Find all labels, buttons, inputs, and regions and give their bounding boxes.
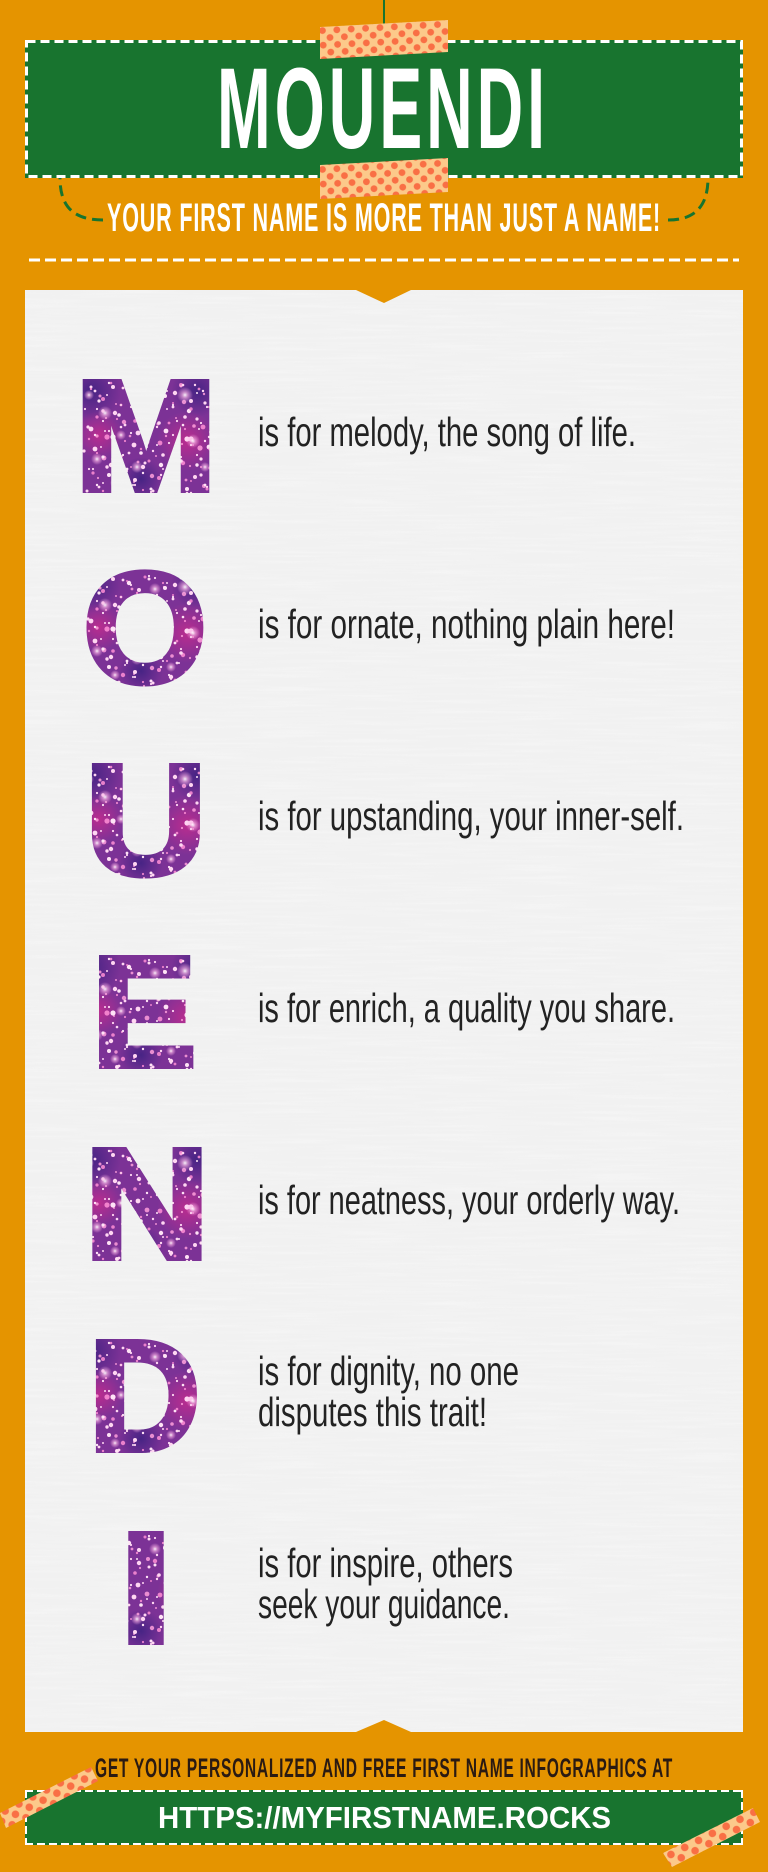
tape: bottom bbox=[320, 158, 448, 199]
tape: top bbox=[320, 20, 448, 59]
tape: footer right bbox=[663, 1808, 760, 1867]
row text I bbox=[258, 1540, 513, 1627]
hanging line bbox=[383, 0, 385, 25]
letter I: I bbox=[119, 1501, 173, 1676]
letter N: N bbox=[84, 1117, 210, 1292]
letter D: D bbox=[88, 1309, 200, 1484]
letter U: U bbox=[85, 733, 207, 908]
row text D bbox=[258, 1348, 519, 1435]
dashed divider bbox=[29, 258, 739, 262]
connector left bbox=[60, 178, 103, 220]
row text D: is for dignity, no one bbox=[258, 1348, 519, 1394]
letter M: M bbox=[74, 349, 218, 524]
letter E: E bbox=[92, 925, 196, 1100]
row text D: disputes this trait! bbox=[258, 1389, 487, 1435]
panel: letters bbox=[25, 290, 743, 1732]
footer url: HTTPS://MYFIRSTNAME.ROCKS bbox=[158, 1800, 611, 1835]
connector right bbox=[668, 178, 708, 220]
letter O: O bbox=[83, 541, 207, 716]
footer banner bbox=[25, 1790, 743, 1845]
row text I: is for inspire, others bbox=[258, 1540, 513, 1586]
title banner bbox=[25, 40, 743, 178]
row text I: seek your guidance. bbox=[258, 1581, 510, 1627]
tape: footer left bbox=[0, 1767, 98, 1828]
